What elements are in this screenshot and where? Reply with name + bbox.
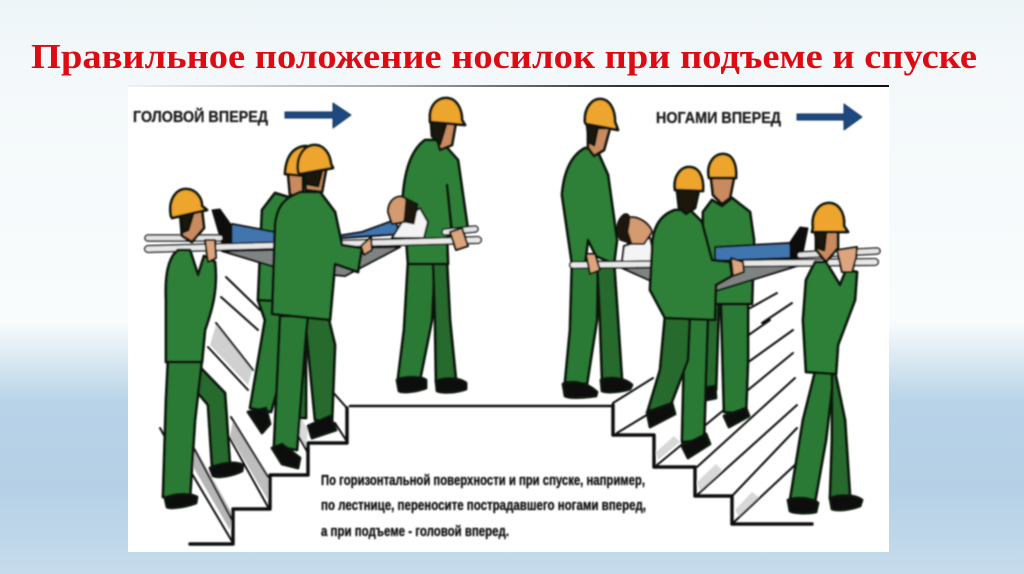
figure: rescuer front, left group [272, 145, 372, 468]
top rule of illustration [128, 85, 889, 87]
figure: rescuer on stairs, left group [163, 189, 243, 508]
patient shoe [212, 209, 232, 246]
stretcher cloth [222, 247, 400, 276]
figure: rescuer behind, left group [248, 146, 306, 433]
ground line [350, 405, 613, 407]
title: Правильное положение носилок при подъеме и спуске [31, 38, 977, 76]
figure: rescuer on stairs, right group [788, 203, 862, 513]
heading: feet first: НОГАМИ ВПЕРЕД [656, 110, 781, 127]
arrow: feet first [797, 104, 862, 130]
stretcher with patient, left group [148, 197, 478, 276]
artwork [133, 98, 877, 544]
instruction text: а при подъеме - головой вперед. [321, 524, 509, 540]
poles [148, 229, 475, 238]
instruction text: По горизонтальной поверхности и при спуске, например, [321, 473, 645, 489]
figure: rescuer at right end, left group [397, 98, 468, 392]
patient legs [715, 243, 792, 261]
panel: illustration [128, 86, 889, 552]
figure: rescuer at left end, right group [562, 99, 632, 398]
poles [800, 251, 877, 255]
heading: head first: ГОЛОВОЙ ВПЕРЕД [133, 108, 268, 126]
figure: rescuer behind, right group [702, 154, 754, 427]
patient torso and head [392, 208, 428, 238]
stretcher with patient, right group [573, 214, 877, 296]
instruction text [321, 473, 646, 540]
stretcher cloth [622, 265, 800, 296]
arrow: head first [285, 103, 351, 128]
patient shoe [790, 227, 808, 259]
right staircase [613, 293, 812, 524]
figure: rescuer front, right group [647, 167, 744, 458]
instruction text: по лестнице, переносите пострадавшего ногами вперед, [321, 498, 646, 514]
patient torso and head [622, 238, 655, 262]
patient legs [225, 220, 400, 246]
left staircase [160, 277, 347, 544]
